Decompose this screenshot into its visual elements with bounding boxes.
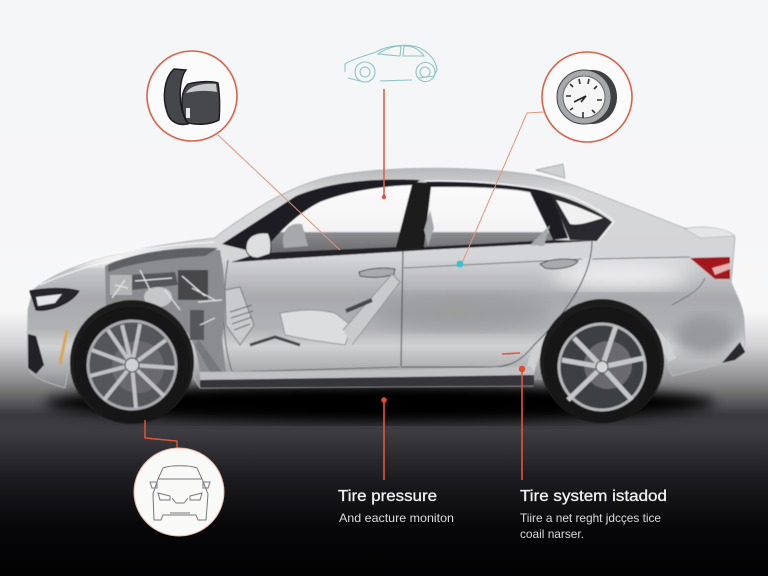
- rear window: [424, 187, 553, 247]
- cutaway seat: [280, 274, 400, 345]
- rear bumper shade: [675, 315, 735, 355]
- front spokes: [90, 324, 175, 408]
- front brake disc: [112, 341, 164, 393]
- rear rim: [559, 324, 645, 410]
- rear wheel: [540, 299, 664, 423]
- quarter window: [556, 200, 603, 225]
- door shadow: [370, 294, 550, 330]
- tail light: [690, 257, 730, 279]
- icon: front car view in circle: [134, 448, 224, 536]
- windshield band: [222, 180, 420, 254]
- door top highlight: [186, 84, 217, 93]
- hood highlight: [74, 248, 174, 268]
- rear arch: [540, 299, 664, 423]
- callout: bottom-left connector: [145, 420, 177, 449]
- amber side marker: [60, 330, 67, 364]
- side mirror: [246, 233, 271, 258]
- rear brake disc: [584, 341, 632, 389]
- gauge ticks: [566, 79, 602, 118]
- callout: top-left connector: [218, 135, 340, 250]
- car outline: [345, 45, 437, 81]
- car wheels: [355, 62, 435, 82]
- window top trim: [425, 181, 568, 240]
- door seams and body lines: [40, 241, 705, 372]
- spoiler: [685, 227, 735, 238]
- body shading: [40, 250, 735, 355]
- icon ring: [147, 51, 237, 141]
- marker: teal dot: [456, 260, 464, 268]
- front hub: [125, 358, 139, 372]
- car body: [27, 168, 745, 388]
- side sill: [200, 366, 534, 388]
- engine cutaway: [105, 248, 226, 372]
- seat silhouettes: [283, 210, 550, 248]
- rear spokes: [562, 326, 644, 400]
- callout: top-centre connector: [383, 89, 385, 197]
- marker: fuel cap dot: [502, 353, 520, 354]
- marker: centre dot: [382, 195, 386, 199]
- gauge back: [567, 70, 617, 124]
- gauge needle: [574, 96, 586, 102]
- front wheel: [70, 300, 194, 424]
- rear bumper details: [722, 342, 745, 363]
- icon: pressure gauge in circle: [542, 52, 632, 142]
- text: tire pressure: [338, 488, 454, 525]
- hood glass: [108, 248, 218, 272]
- marker: sill dot: [519, 366, 525, 372]
- callout: sill connector: [521, 369, 523, 480]
- rear hub: [596, 361, 608, 373]
- ground shadow: [45, 384, 715, 422]
- front tire: [74, 307, 190, 423]
- heading: Tire pressure: [338, 488, 437, 505]
- icon disc: [134, 448, 224, 536]
- headlight lens: [36, 294, 62, 306]
- callout: top-right connector: [462, 112, 544, 263]
- door shape: [182, 82, 220, 124]
- headlight: [30, 288, 79, 310]
- rear tire: [544, 307, 660, 423]
- marker: lower-centre dot: [381, 397, 387, 403]
- gauge face: [563, 76, 605, 118]
- car front outline: [150, 466, 210, 520]
- front grille: [28, 334, 44, 374]
- quarter panel highlight: [550, 261, 690, 289]
- gauge ring: [542, 52, 632, 142]
- engine bay: [105, 250, 226, 372]
- engine highlights: [112, 270, 222, 325]
- front arch: [70, 300, 194, 424]
- text: tire system: [520, 488, 667, 541]
- front window: [262, 185, 412, 253]
- caption: And eacture moniton: [339, 511, 454, 525]
- shark fin antenna: [536, 164, 565, 178]
- chrome window trim: [425, 181, 614, 241]
- side windows: [222, 180, 614, 262]
- car illustration: [27, 164, 745, 424]
- quarter frame: [550, 193, 612, 241]
- car windows: [378, 46, 424, 56]
- door notch: [186, 108, 190, 118]
- icon: teal car outline: [345, 45, 437, 82]
- tire shape: [164, 69, 188, 124]
- caption line two: coail narser.: [520, 527, 584, 541]
- heading: Tire system istadod: [520, 488, 667, 505]
- centre pillar: [395, 182, 434, 249]
- engine parts: [110, 270, 222, 372]
- caption line one: Tiire a net reght jdcçes tice: [520, 511, 661, 525]
- front rim: [88, 321, 176, 409]
- icon: door and tire in circle: [147, 51, 237, 141]
- gauge bezel: [557, 70, 611, 124]
- callout: lower-centre connector: [383, 400, 385, 480]
- shock absorber: [225, 287, 300, 345]
- wheel arch highlight rear: [530, 312, 672, 372]
- door handles: [359, 259, 578, 277]
- window sill line: [232, 240, 593, 262]
